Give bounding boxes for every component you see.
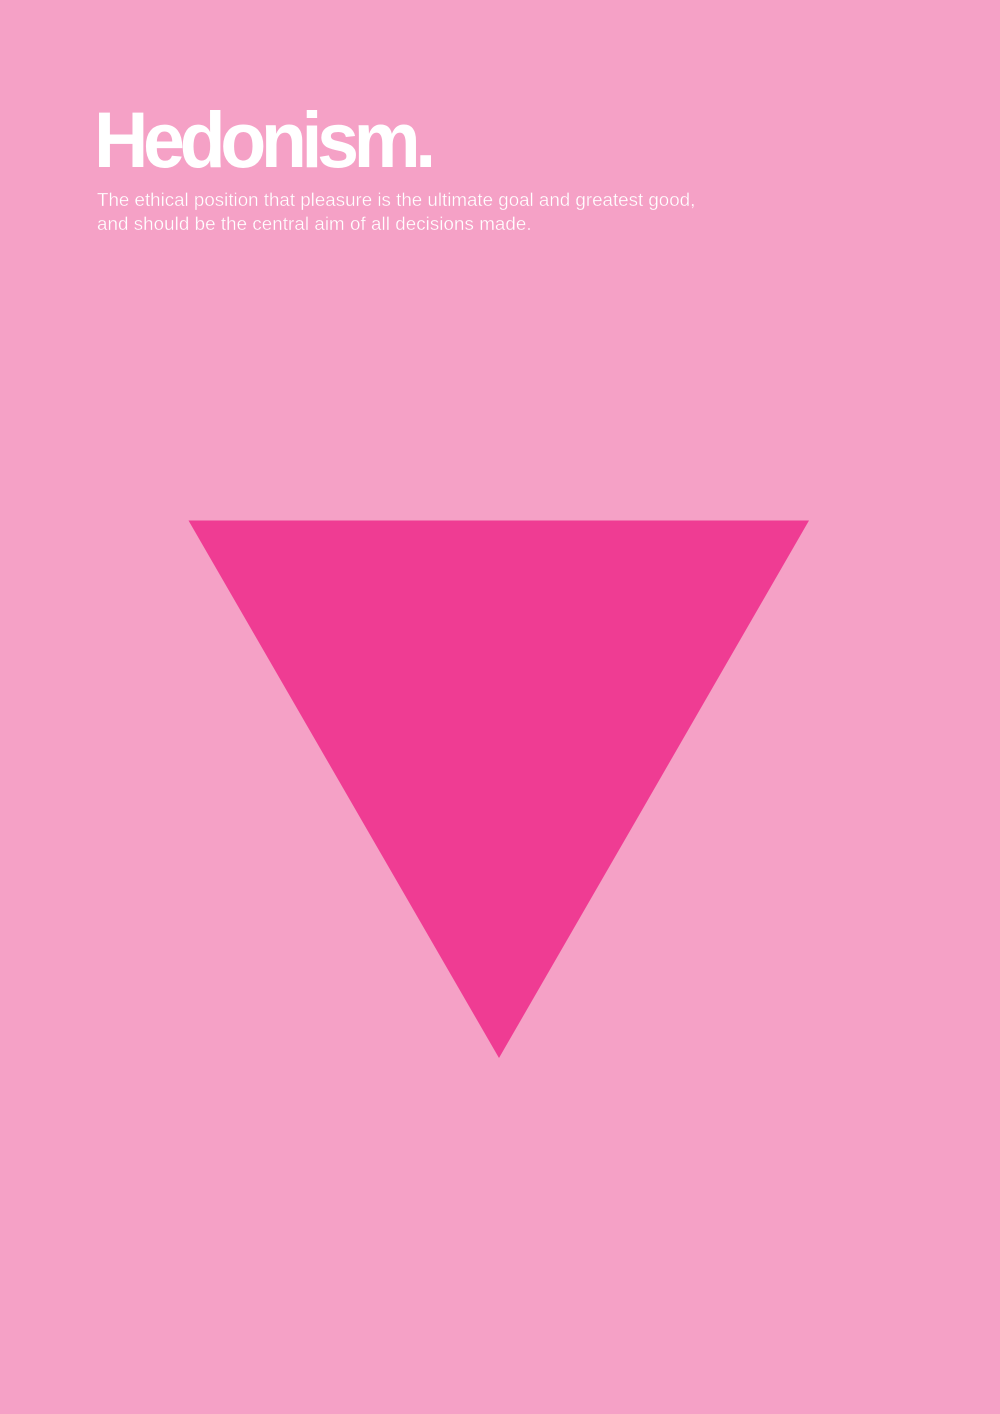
description text: The ethical position that pleasure is the ultimate goal and greatest good, (97, 189, 695, 210)
description text: and should be the central aim of all decisions made. (97, 213, 532, 234)
title: Hedonism. (94, 96, 431, 184)
description text (97, 189, 695, 234)
